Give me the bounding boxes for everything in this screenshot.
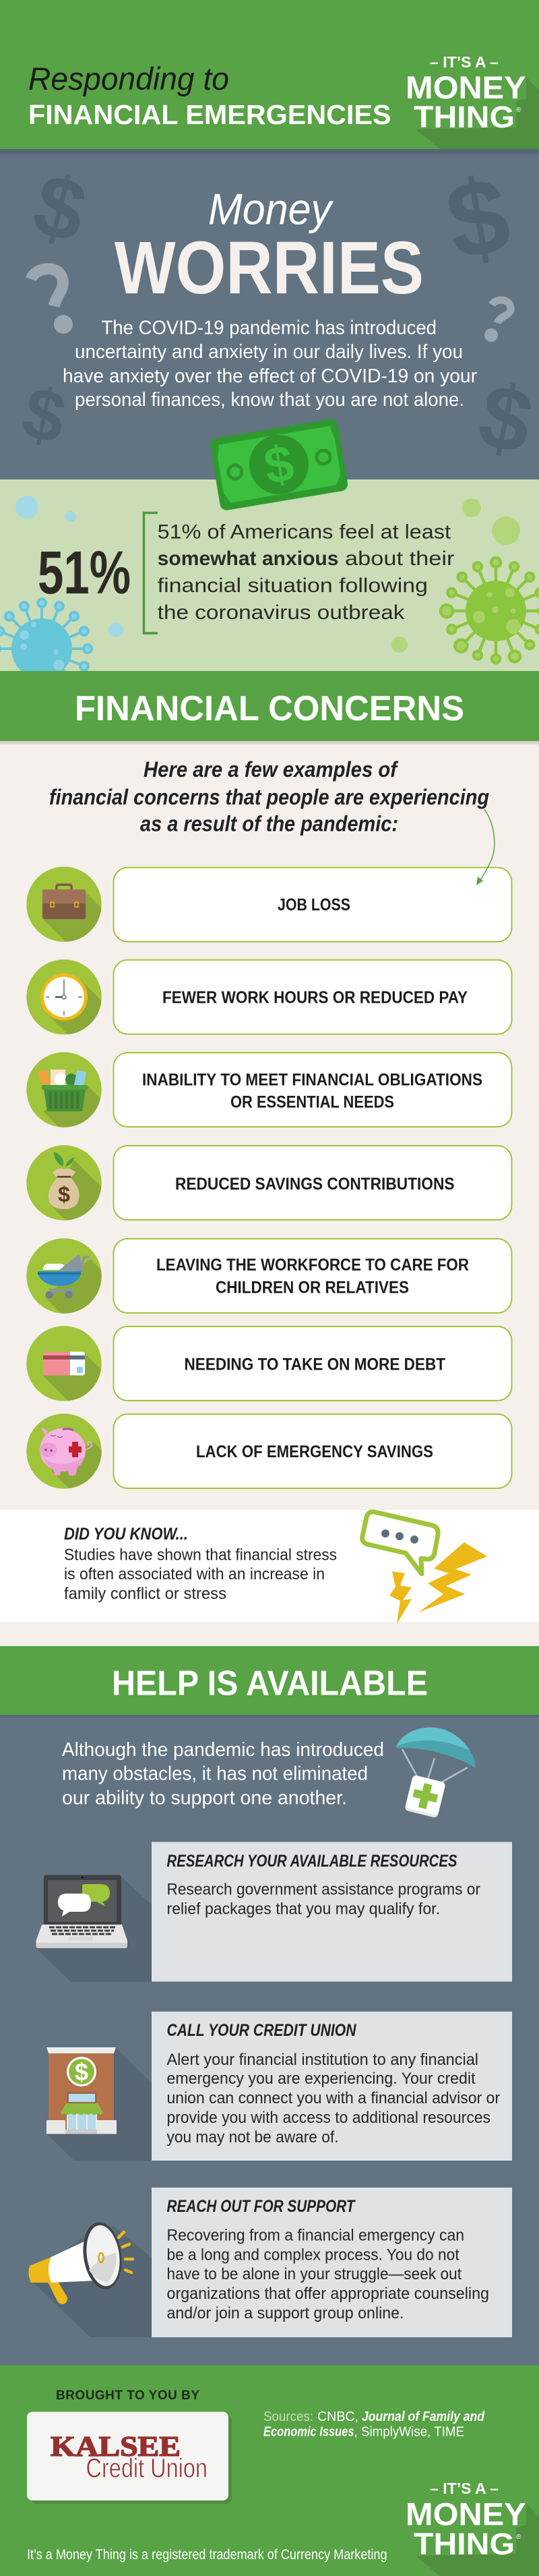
- text block: statistic: the coronavirus outbreak: [158, 602, 406, 624]
- box: call credit union: emergency you are experiencing. Your credit: [167, 2070, 476, 2088]
- text block: help intro: our ability to support one another.: [62, 1788, 347, 1809]
- pill: fewer hours: FEWER WORK HOURS OR REDUCED PAY: [162, 989, 468, 1007]
- pill: savings: REDUCED SAVINGS CONTRIBUTIONS: [175, 1175, 454, 1194]
- logo: It's a Money Thing: THING: [414, 100, 515, 134]
- text block: did you know: DID YOU KNOW...: [64, 1525, 188, 1544]
- pill: financial obligations: INABILITY TO MEET FINANCIAL OBLIGATIONS: [142, 1071, 482, 1090]
- text block: statistic: 51% of Americans feel at least: [158, 521, 451, 544]
- heading: Help Is Available: HELP IS AVAILABLE: [112, 1664, 428, 1703]
- card: call credit union: [46, 2012, 512, 2161]
- pill: emergency savings: [113, 1414, 512, 1488]
- text block: sources: Journal of Family and: [362, 2409, 485, 2424]
- text block: statistic: about their: [345, 548, 454, 570]
- icon: money bag: $: [58, 1182, 70, 1206]
- text block: did you know: family conflict or stress: [64, 1585, 226, 1603]
- box: reach out for support: [152, 2188, 512, 2337]
- box: call credit union: Alert your financial institution to any financial: [167, 2051, 478, 2069]
- pill: debt: [113, 1326, 512, 1401]
- icon: grocery basket: [26, 1052, 102, 1128]
- text block: sources: , SimplyWise, TIME: [354, 2424, 464, 2439]
- logo: It's a Money Thing footer: ®: [516, 2534, 521, 2541]
- text block: help intro: many obstacles, it has not eliminated: [62, 1763, 368, 1784]
- box: research resources: Research government assistance programs or: [167, 1881, 480, 1899]
- text block: statistic: financial situation following: [158, 575, 428, 597]
- text block: sources: Sources:: [263, 2409, 313, 2424]
- icon: dollar signs and question marks: $: [471, 365, 539, 473]
- text block: trademark: It’s a Money Thing is a registered trademark of Currency Marketing: [27, 2547, 387, 2563]
- row: workforce: [26, 1238, 512, 1314]
- text block: concerns intro: Here are a few examples of: [144, 757, 399, 782]
- text block: intro: personal finances, know that you are not alone.: [75, 389, 464, 411]
- icon: laptop: [36, 1875, 152, 1982]
- box: reach out for support: and/or join a support group online.: [167, 2304, 404, 2322]
- icon: dollar signs and question marks: $: [438, 153, 518, 283]
- text block: concerns intro: as a result of the pandemic:: [140, 812, 398, 836]
- text block: help intro: Although the pandemic has introduced: [62, 1739, 384, 1761]
- box: call credit union: you may not be aware of.: [167, 2128, 338, 2146]
- sponsor logo card: [27, 2411, 232, 2504]
- heading: Money Worries: Money: [208, 185, 334, 234]
- text block: concerns intro: financial concerns that people are experiencing: [49, 785, 489, 809]
- row: debt: [26, 1326, 512, 1401]
- icon: money bag: [26, 1145, 102, 1221]
- text block: concerns intro: [49, 757, 489, 836]
- icon: parachute with medical crate: [396, 1728, 476, 1818]
- text block: intro: uncertainty and anxiety in our daily lives. If you: [75, 341, 463, 363]
- icon: dollar signs and question marks: $: [16, 371, 73, 459]
- title: Responding to: [28, 61, 229, 96]
- box: research resources: relief packages that you may qualify for.: [167, 1900, 440, 1919]
- pill: workforce: [113, 1239, 512, 1313]
- logo: It's a Money Thing footer: – IT’S A –: [430, 2480, 499, 2497]
- pill: debt: NEEDING TO TAKE ON MORE DEBT: [185, 1355, 445, 1374]
- label: brought to you by: BROUGHT TO YOU BY: [56, 2389, 199, 2403]
- text block: intro: have anxiety over the effect of COVID-19 on your: [63, 365, 477, 387]
- panel: money worries: [0, 149, 539, 479]
- pill: financial obligations: OR ESSENTIAL NEEDS: [230, 1092, 394, 1111]
- pill: fewer hours: [113, 960, 512, 1034]
- sponsor logo card: Credit Union: [86, 2454, 208, 2484]
- logo: It's a Money Thing footer: THING: [414, 2527, 515, 2561]
- pill: emergency savings: LACK OF EMERGENCY SAVINGS: [196, 1442, 433, 1461]
- box: call credit union: provide you with access to additional resources: [167, 2109, 490, 2127]
- pill: savings: [113, 1146, 512, 1220]
- box: research resources: RESEARCH YOUR AVAILABLE RESOURCES: [167, 1852, 457, 1871]
- icon: credit card: [26, 1326, 102, 1401]
- box: reach out for support: Recovering from a financial emergency can: [167, 2227, 464, 2245]
- text block: intro: [63, 317, 477, 411]
- panel: footer: [0, 2366, 539, 2576]
- pill: workforce: CHILDREN OR RELATIVES: [216, 1279, 409, 1297]
- sponsor logo card: KALSEE: [51, 2432, 181, 2463]
- panel: 51 percent statistic: [0, 479, 539, 671]
- text block: sources: CNBC,: [317, 2409, 358, 2424]
- logo: It's a Money Thing: – IT’S A –: [430, 53, 499, 71]
- logo: It's a Money Thing: [406, 53, 526, 134]
- box: reach out for support: REACH OUT FOR SUPPORT: [167, 2197, 356, 2216]
- icon: clock: [26, 959, 102, 1034]
- text block: statistic: somewhat anxious: [158, 548, 338, 570]
- box: reach out for support: be a long and complex process. You do not: [167, 2246, 459, 2264]
- icon: lightning bolts: [389, 1542, 487, 1624]
- logo: It's a Money Thing footer: MONEY: [406, 2496, 526, 2531]
- icon: dollar signs and question marks: $: [24, 154, 96, 262]
- row: emergency savings: [26, 1413, 512, 1489]
- text block: sources: [263, 2409, 485, 2439]
- text block: did you know: is often associated with an increase in: [64, 1565, 325, 1583]
- logo: It's a Money Thing: MONEY: [406, 69, 526, 105]
- row: fewer hours: [26, 959, 512, 1034]
- icon: banknote: $: [260, 434, 298, 496]
- box: call credit union: CALL YOUR CREDIT UNION: [167, 2021, 356, 2040]
- icon: speech bubble: [362, 1512, 438, 1574]
- row: financial obligations: [26, 1052, 512, 1128]
- row: savings: [26, 1145, 512, 1221]
- panel: did you know: [0, 1510, 539, 1624]
- icon: briefcase: [26, 867, 102, 942]
- panel: header band: [0, 0, 539, 149]
- text block: intro: The COVID-19 pandemic has introduced: [101, 317, 437, 339]
- icon: banknote: [209, 418, 349, 511]
- pill: job loss: [113, 867, 512, 941]
- heading: Money Worries: [115, 185, 424, 310]
- card: research resources: [36, 1842, 512, 1982]
- icon: stroller: [26, 1238, 102, 1314]
- row: job loss: [26, 867, 512, 943]
- heading: Financial Concerns: FINANCIAL CONCERNS: [75, 689, 464, 728]
- text block: statistic: [158, 521, 454, 624]
- text block: did you know: Studies have shown that financial stress: [64, 1546, 337, 1564]
- logo: It's a Money Thing: ®: [516, 107, 521, 114]
- pill: job loss: JOB LOSS: [278, 896, 350, 914]
- icon: bank building: $: [75, 2058, 88, 2086]
- icon: dollar signs and question marks: [16, 153, 539, 473]
- pill: financial obligations: [113, 1053, 512, 1127]
- decorative droplets: [15, 496, 520, 653]
- logo: It's a Money Thing footer: [406, 2480, 526, 2561]
- text block: did you know: [64, 1525, 337, 1603]
- box: reach out for support: organizations that offer appropriate counseling: [167, 2285, 489, 2303]
- icon: bank building: [46, 2047, 152, 2161]
- text block: sources: Economic Issues: [263, 2424, 354, 2439]
- icon: megaphone: [28, 2220, 152, 2337]
- arrow: curved pointer: [476, 809, 495, 885]
- box: call credit union: [152, 2012, 512, 2161]
- icon: blue virus: [0, 597, 93, 671]
- bracket: [144, 513, 158, 633]
- heading: Money Worries: WORRIES: [115, 227, 424, 310]
- title: [28, 61, 391, 130]
- pill: workforce: LEAVING THE WORKFORCE TO CARE FOR: [156, 1256, 469, 1275]
- box: call credit union: union can connect you with a financial advisor or: [167, 2089, 500, 2107]
- box: reach out for support: have to be alone in your struggle—seek out: [167, 2265, 462, 2283]
- panel: help is available: [0, 1646, 539, 2366]
- panel: financial concerns: [0, 671, 539, 2576]
- title: FINANCIAL EMERGENCIES: [28, 99, 391, 130]
- box: research resources: [152, 1842, 512, 1981]
- card: reach out for support: [28, 2188, 512, 2337]
- icon: piggy bank: [26, 1413, 102, 1489]
- icon: green virus: [441, 558, 539, 664]
- big number: 51%: 51%: [38, 539, 131, 607]
- text block: help intro: [62, 1739, 384, 1809]
